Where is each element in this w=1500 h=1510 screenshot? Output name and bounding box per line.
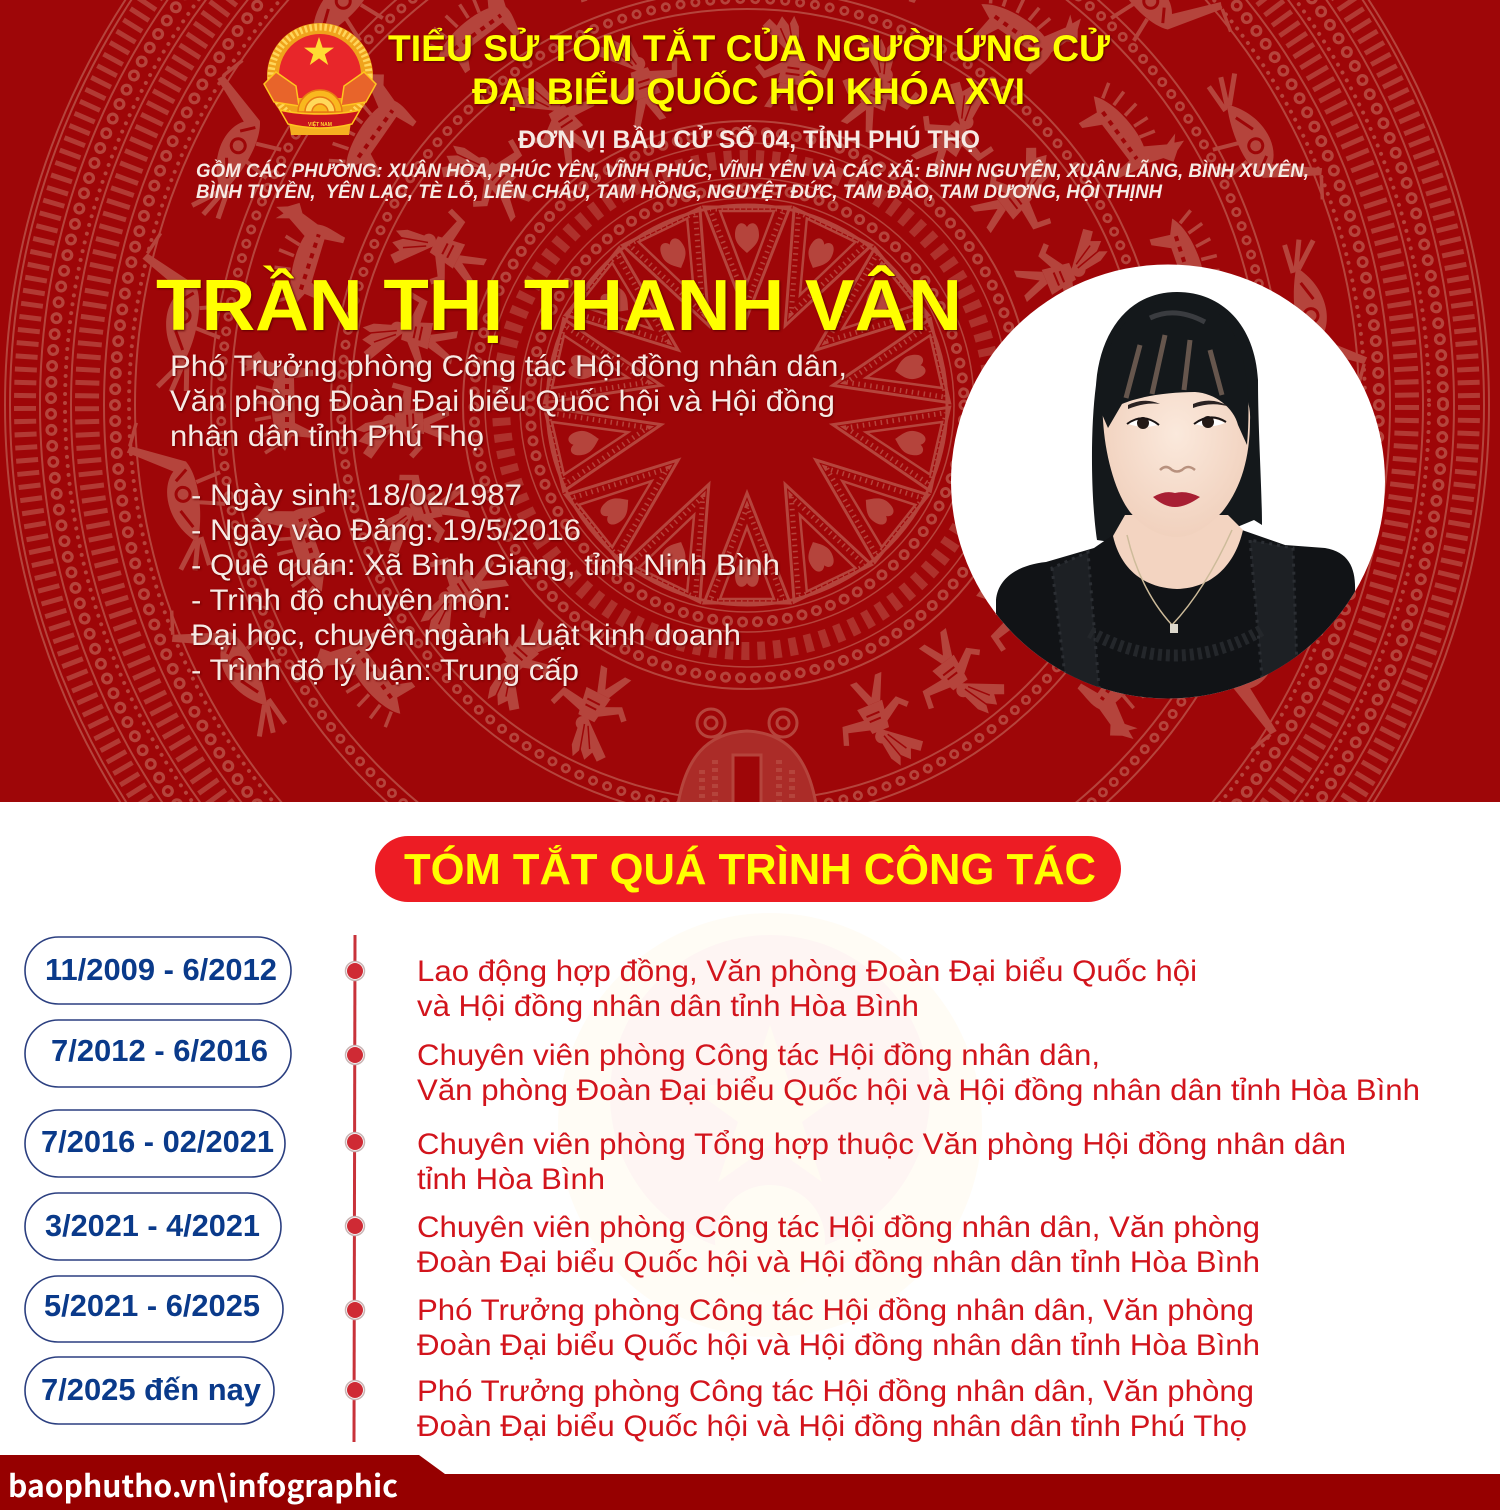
role 3: tỉnh Hòa Bình: [417, 1163, 605, 1196]
role 2: Chuyên viên phòng Công tác Hội đồng nhân dân,: [417, 1039, 1100, 1072]
period 3: [25, 1110, 285, 1177]
role 2: Văn phòng Đoàn Đại biểu Quốc hội và Hội đồng nhân dân tỉnh Hòa Bình: [417, 1074, 1420, 1107]
icon: national emblem: [264, 23, 376, 135]
lips: [1153, 492, 1200, 507]
footer bar: [0, 1455, 1500, 1510]
role 3: Chuyên viên phòng Tổng hợp thuộc Văn phòng Hội đồng nhân dân: [417, 1128, 1346, 1161]
period 1: 11/2009 - 6/2012: [45, 952, 277, 987]
body: [996, 530, 1355, 700]
panel: red drum header background: [0, 0, 1500, 802]
role 4: Chuyên viên phòng Công tác Hội đồng nhân dân, Văn phòng: [417, 1211, 1260, 1244]
heading: candidate name: TRẦN THỊ THANH VÂN: [156, 265, 962, 346]
role 5: [417, 1294, 1260, 1362]
bronze drum pattern: [4, 0, 1490, 802]
fringe: [1102, 350, 1248, 445]
period 5: [25, 1276, 283, 1342]
role 1: Lao động hợp đồng, Văn phòng Đoàn Đại biểu Quốc hội: [417, 955, 1197, 988]
title: ĐẠI BIỂU QUỐC HỘI KHÓA XVI: [472, 70, 1025, 112]
role 1: và Hội đồng nhân dân tỉnh Hòa Bình: [417, 990, 919, 1023]
text block: personal details: - Ngày vào Đảng: 19/5/2016: [191, 514, 581, 547]
text block: personal details: - Trình độ chuyên môn:: [191, 584, 511, 617]
timeline axis: [346, 935, 364, 1442]
period 5: 5/2021 - 6/2025: [44, 1288, 260, 1323]
heading: career summary pill: TÓM TẮT QUÁ TRÌNH CÔNG TÁC: [404, 843, 1096, 894]
necklace: [1127, 530, 1232, 625]
eyebrows: [1128, 401, 1230, 409]
subtitle: electoral unit: ĐƠN VỊ BẦU CỬ SỐ 04, TỈNH PHÚ THỌ: [518, 124, 980, 154]
text block: personal details: - Ngày sinh: 18/02/1987: [191, 479, 522, 512]
role 4: Đoàn Đại biểu Quốc hội và Hội đồng nhân dân tỉnh Hòa Bình: [417, 1246, 1260, 1279]
eyes: [1128, 419, 1225, 427]
icon: national emblem: VIỆT NAM: [308, 120, 332, 128]
nose: [1160, 467, 1195, 472]
text block: personal details: Đại học, chuyên ngành Luật kinh doanh: [191, 619, 741, 652]
footer bar: baophutho.vn\infographic: [8, 1462, 398, 1506]
back hair: [1092, 292, 1262, 545]
role 5: Đoàn Đại biểu Quốc hội và Hội đồng nhân dân tỉnh Hòa Bình: [417, 1329, 1260, 1362]
neck and chest: [1113, 515, 1243, 589]
role 4: [417, 1211, 1260, 1279]
role 3: [417, 1128, 1346, 1196]
text block: position: Văn phòng Đoàn Đại biểu Quốc hội và Hội đồng: [170, 385, 835, 418]
title: TIỂU SỬ TÓM TẮT CỦA NGƯỜI ỨNG CỬ: [388, 27, 1110, 69]
text block: position: nhân dân tỉnh Phú Thọ: [170, 420, 484, 453]
role 6: Đoàn Đại biểu Quốc hội và Hội đồng nhân dân tỉnh Phú Thọ: [417, 1410, 1247, 1443]
period 6: 7/2025 đến nay: [41, 1372, 262, 1407]
role 5: Phó Trưởng phòng Công tác Hội đồng nhân dân, Văn phòng: [417, 1294, 1254, 1327]
text block: personal details: [191, 479, 780, 687]
period 2: 7/2012 - 6/2016: [51, 1033, 268, 1068]
portrait photo: [951, 264, 1385, 700]
period 4: 3/2021 - 4/2021: [45, 1208, 260, 1243]
text block: wards and communes: BÌNH TUYỀN, YÊN LẠC, TÈ LỖ, LIÊN CHÂU, TAM HỒNG, NGUYỆT ĐỨC, TAM ĐẢO, TAM DƯƠNG, HỘI THỊNH: [196, 181, 1163, 203]
title: [388, 27, 1110, 112]
period 2: [25, 1020, 291, 1087]
period 6: [25, 1357, 274, 1424]
period 1: [25, 937, 291, 1004]
role 6: Phó Trưởng phòng Công tác Hội đồng nhân dân, Văn phòng: [417, 1375, 1254, 1408]
period 4: [25, 1193, 281, 1260]
text block: position: [170, 350, 847, 453]
text block: personal details: - Trình độ lý luận: Trung cấp: [191, 654, 579, 687]
text block: position: Phó Trưởng phòng Công tác Hội đồng nhân dân,: [170, 350, 847, 383]
text block: wards and communes: GỒM CÁC PHƯỜNG: XUÂN HÒA, PHÚC YÊN, VĨNH PHÚC, VĨNH YÊN VÀ CÁC XÃ: BÌNH NGUYÊN, XUÂN LÃNG, BÌNH XUYÊN,: [196, 160, 1309, 182]
panel: white career section background: [0, 802, 1500, 1510]
role 6: [417, 1375, 1254, 1443]
heading: career summary pill: [375, 836, 1121, 902]
watermark emblem: [558, 913, 982, 1337]
face: [1102, 392, 1250, 515]
text block: wards and communes: [196, 160, 1309, 203]
text block: personal details: - Quê quán: Xã Bình Giang, tỉnh Ninh Bình: [191, 549, 780, 582]
role 2: [417, 1039, 1420, 1107]
role 1: [417, 955, 1197, 1023]
period 3: 7/2016 - 02/2021: [41, 1124, 274, 1159]
